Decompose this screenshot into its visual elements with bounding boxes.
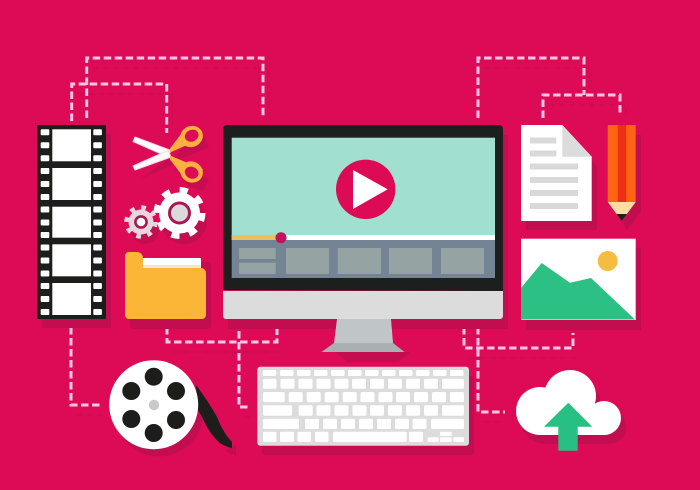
icon: small gear <box>127 208 159 244</box>
icon: keyboard <box>257 367 474 455</box>
timeline bar <box>232 235 495 240</box>
connector: document to pencil <box>543 95 620 118</box>
monitor body <box>223 125 503 319</box>
icon: pencil <box>608 125 641 230</box>
icon: document <box>521 125 597 230</box>
playhead <box>276 232 286 243</box>
icon: large gear <box>158 191 207 244</box>
connector: folder to monitor <box>167 327 277 342</box>
connector: monitor to cloud <box>478 327 505 412</box>
video screen <box>232 138 495 236</box>
icon: landscape image <box>521 239 641 330</box>
monitor <box>223 125 508 362</box>
icon: scissors <box>133 122 209 191</box>
connector line shadows <box>77 68 626 422</box>
icon: folder <box>125 252 211 329</box>
connector: film to monitor <box>87 58 263 118</box>
connector: film to reel <box>71 327 103 405</box>
monitor shadow <box>228 135 508 329</box>
icon: cloud upload <box>516 370 626 451</box>
icon: film strip <box>37 125 111 328</box>
icon: film reel <box>109 360 236 456</box>
play button <box>336 160 395 219</box>
connector: monitor to image <box>464 327 573 348</box>
connector: film to scissors <box>72 84 167 133</box>
connector: monitor to keyboard <box>239 331 250 407</box>
connector: monitor to pencil <box>478 58 584 118</box>
thumbnail strip <box>232 240 495 278</box>
monitor stand <box>322 319 404 352</box>
